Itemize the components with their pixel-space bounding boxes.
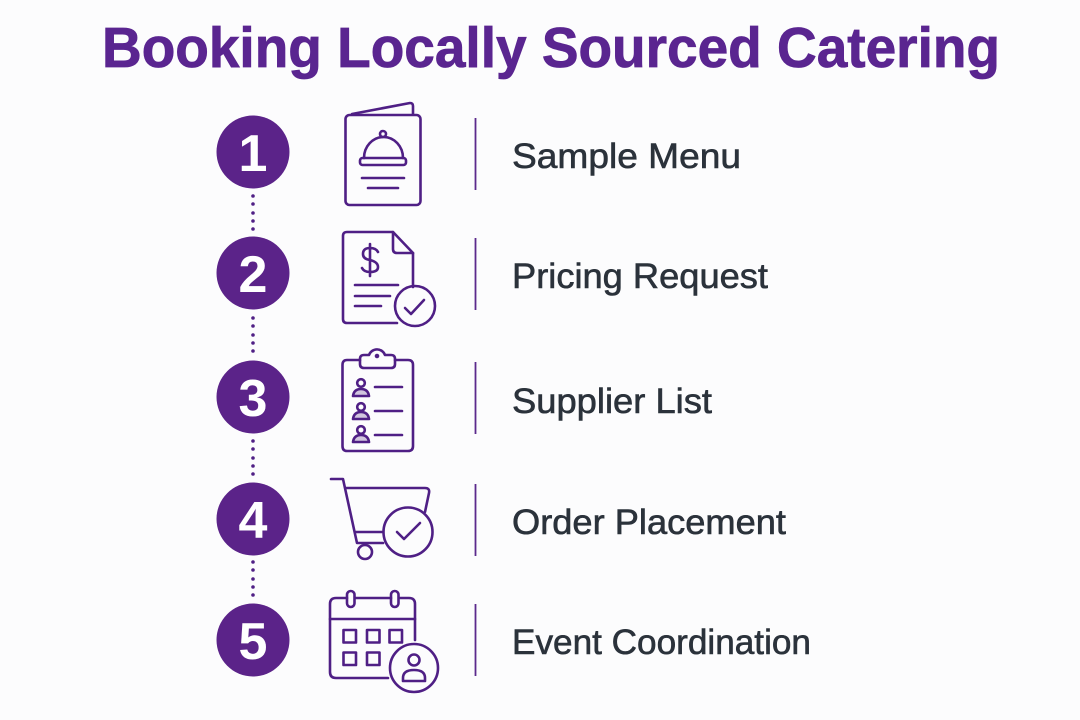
- divider: [474, 118, 476, 190]
- label: Supplier List: [512, 382, 712, 421]
- icon: calendar with person: [330, 591, 438, 692]
- divider: [474, 484, 476, 556]
- number badge 1: [216, 116, 290, 188]
- label: Pricing Request: [512, 257, 768, 296]
- number badge 2: 2: [239, 246, 267, 304]
- number badge 4: [216, 482, 290, 556]
- step 2: pricing request: [216, 232, 768, 326]
- icon: clipboard with people: [342, 349, 413, 451]
- divider: [474, 238, 476, 310]
- icon: priced document with check: [343, 232, 435, 326]
- label: Sample Menu: [512, 137, 741, 176]
- label: Order Placement: [512, 503, 786, 542]
- connector dots 2-3: [251, 316, 255, 353]
- divider: [474, 604, 476, 676]
- step 1: sample menu: [216, 103, 741, 205]
- connector dots 3-4: [251, 439, 255, 476]
- step 5: event coordination: [216, 591, 811, 692]
- divider: [474, 362, 476, 434]
- number badge 1: 1: [239, 125, 267, 183]
- label: Event Coordination: [512, 623, 811, 662]
- icon: menu with cloche: [346, 103, 420, 205]
- connector dots 4-5: [251, 560, 255, 597]
- number badge 4: 4: [239, 492, 268, 550]
- title: Booking Locally Sourced Catering: [102, 16, 1000, 80]
- number badge 2: [216, 236, 290, 310]
- connector dots 1-2: [251, 194, 255, 231]
- number badge 5: 5: [239, 613, 267, 671]
- number badge 3: 3: [239, 370, 267, 428]
- icon: shopping cart with check: [331, 479, 432, 559]
- step 3: supplier list: [216, 349, 712, 451]
- number badge 3: [216, 360, 290, 434]
- step 4: order placement: [216, 479, 786, 559]
- number badge 5: [216, 604, 290, 676]
